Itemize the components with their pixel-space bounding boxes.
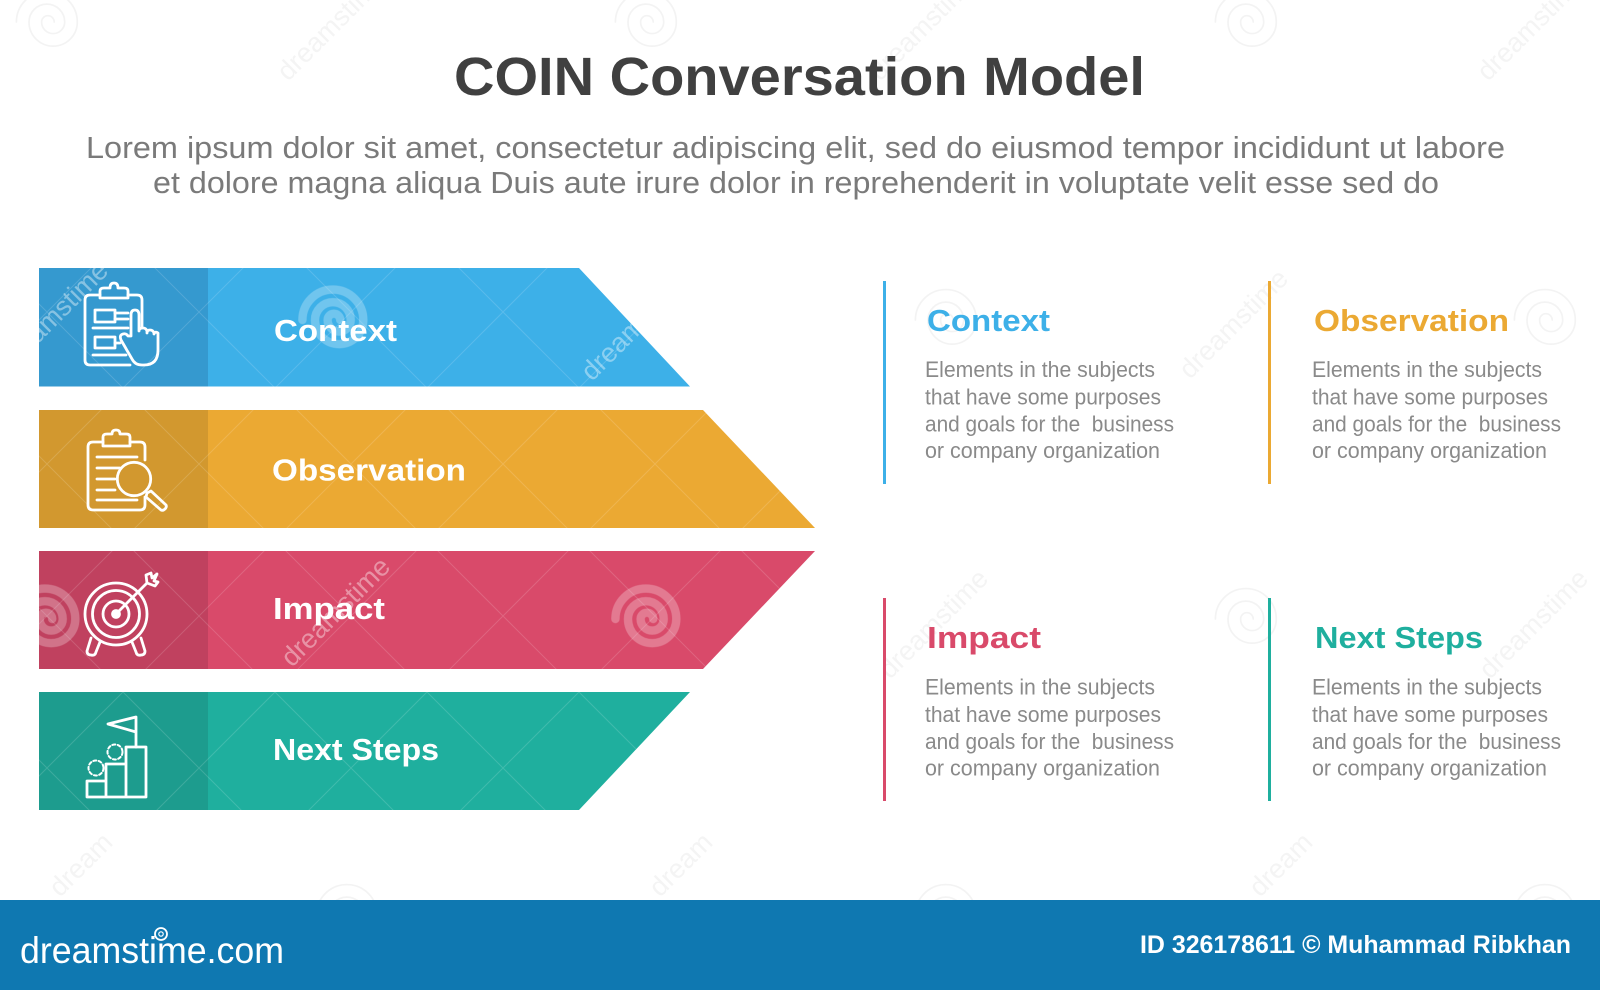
label: next steps: Next Steps xyxy=(273,732,439,767)
text block: observation: that have some purposes xyxy=(1312,384,1548,410)
heading: impact: Impact xyxy=(927,620,1041,655)
heading: next steps: Next Steps xyxy=(1315,620,1483,655)
text block: impact: or company organization xyxy=(925,756,1160,780)
text block: context: Elements in the subjects xyxy=(925,357,1155,382)
panel: observation description xyxy=(1268,281,1561,484)
watermark pattern on background: dream xyxy=(643,827,718,902)
panel: next steps description xyxy=(1268,598,1561,801)
text block: observation xyxy=(1312,357,1561,463)
panel: observation arrow bar xyxy=(39,410,815,528)
icon: target with arrow xyxy=(85,573,158,655)
heading: context: Context xyxy=(927,303,1050,338)
text block: impact: that have some purposes xyxy=(925,702,1161,727)
watermark pattern on background: dreamstime xyxy=(873,563,994,684)
icon: stair steps with flag xyxy=(87,717,146,797)
subtitle text: et dolore magna aliqua Duis aute irure dolor in reprehenderit in voluptate velit esse sed do xyxy=(153,165,1439,200)
panel: impact arrow bar xyxy=(39,551,815,669)
text block: context: that have some purposes xyxy=(925,384,1161,410)
label: impact: Impact xyxy=(273,591,385,626)
text block: next steps: or company organization xyxy=(1312,756,1547,780)
text block: impact: and goals for the business xyxy=(925,729,1174,754)
text block: next steps: Elements in the subjects xyxy=(1312,674,1542,700)
text block: next steps xyxy=(1312,674,1561,780)
footer logo: dreamstime.com xyxy=(20,930,284,971)
label: context: Context xyxy=(274,313,397,348)
watermark pattern on background: dreamstime xyxy=(1473,563,1594,684)
watermark pattern on background: dreamstime xyxy=(1173,263,1294,384)
title: COIN Conversation Model xyxy=(454,47,1145,107)
text block: context: and goals for the business xyxy=(925,412,1174,436)
watermark overlay on bars xyxy=(39,268,780,810)
text block: next steps: and goals for the business xyxy=(1312,729,1561,754)
text block: observation: Elements in the subjects xyxy=(1312,357,1542,382)
text block: impact: Elements in the subjects xyxy=(925,674,1155,700)
icon: clipboard with magnifier xyxy=(88,430,166,510)
subtitle text: Lorem ipsum dolor sit amet, consectetur adipiscing elit, sed do eiusmod tempor incididunt ut labore xyxy=(86,130,1505,165)
panel: impact description xyxy=(883,598,1174,801)
panel: context description xyxy=(883,281,1174,484)
watermark pattern on background: dream xyxy=(43,827,118,902)
text block: context xyxy=(925,357,1174,463)
text block: observation: and goals for the business xyxy=(1312,412,1561,436)
watermark overlay on bars: dreamstime xyxy=(275,551,396,672)
icon: clipboard with pointing hand xyxy=(85,283,158,365)
watermark pattern on background: dream xyxy=(1243,827,1318,902)
text block: next steps: that have some purposes xyxy=(1312,702,1548,727)
label: observation: Observation xyxy=(272,453,466,488)
text block: context: or company organization xyxy=(925,438,1160,463)
text block: observation: or company organization xyxy=(1312,438,1547,463)
footer credit: ID 326178611 © Muhammad Ribkhan xyxy=(1140,931,1571,959)
subtitle text xyxy=(86,130,1505,200)
panel: context arrow bar xyxy=(39,268,690,386)
panel: next steps arrow bar xyxy=(39,692,690,810)
watermark overlay on bars: dreamstime xyxy=(575,265,696,386)
text block: impact xyxy=(925,674,1174,780)
footer band xyxy=(0,900,1600,990)
heading: observation: Observation xyxy=(1314,303,1509,338)
